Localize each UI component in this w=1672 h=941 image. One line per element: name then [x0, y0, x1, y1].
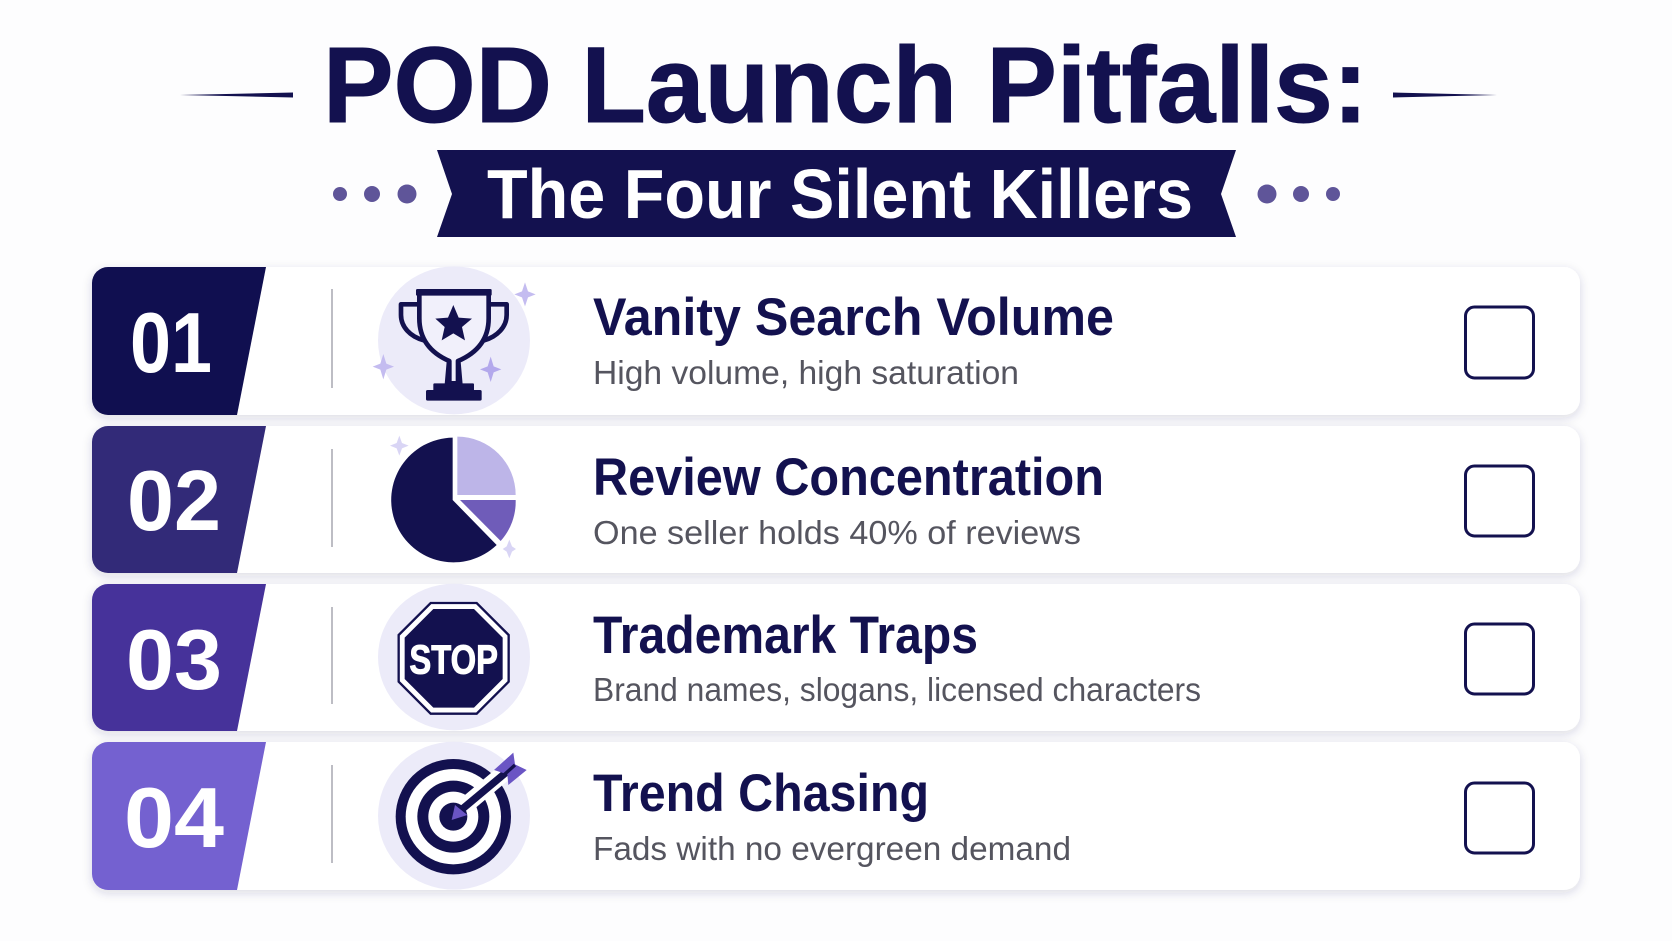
left title rule	[180, 92, 293, 98]
badge 02: 02	[127, 454, 221, 549]
badge 01	[92, 267, 266, 415]
checkbox 03	[1466, 624, 1534, 694]
title: POD Launch Pitfalls:	[323, 24, 1368, 145]
right dots	[1258, 184, 1340, 204]
text 04: Fads with no evergreen demand	[593, 830, 1071, 867]
heading 03: Trademark Traps	[593, 606, 978, 665]
checkbox 04	[1466, 783, 1534, 853]
left dots	[333, 184, 416, 204]
checkbox 01	[1466, 307, 1534, 378]
text 02: One seller holds 40% of reviews	[593, 514, 1081, 551]
badge 03: 03	[126, 613, 222, 708]
icon: trophy	[373, 266, 536, 414]
heading 01: Vanity Search Volume	[593, 288, 1114, 347]
icon: pie chart	[390, 436, 516, 562]
panel: item 04	[92, 742, 1580, 890]
badge 01: 01	[130, 296, 212, 391]
icon: stop sign	[378, 584, 530, 730]
badge 03	[92, 584, 266, 731]
panel: item 03	[92, 584, 1580, 731]
checkbox 02	[1466, 466, 1534, 536]
right title rule	[1393, 92, 1497, 98]
panel: item 01	[92, 266, 1580, 415]
badge 02	[92, 426, 266, 573]
badge 04	[92, 742, 266, 890]
panel: item 02	[92, 426, 1580, 573]
subtitle banner: The Four Silent Killers	[487, 155, 1193, 233]
heading 04: Trend Chasing	[593, 764, 929, 823]
badge 04: 04	[124, 771, 224, 866]
heading 02: Review Concentration	[593, 448, 1104, 507]
icon: stop sign: STOP	[409, 636, 498, 682]
text 01: High volume, high saturation	[593, 354, 1019, 391]
text 03: Brand names, slogans, licensed characters	[593, 671, 1201, 708]
icon: target with arrow	[378, 742, 530, 890]
